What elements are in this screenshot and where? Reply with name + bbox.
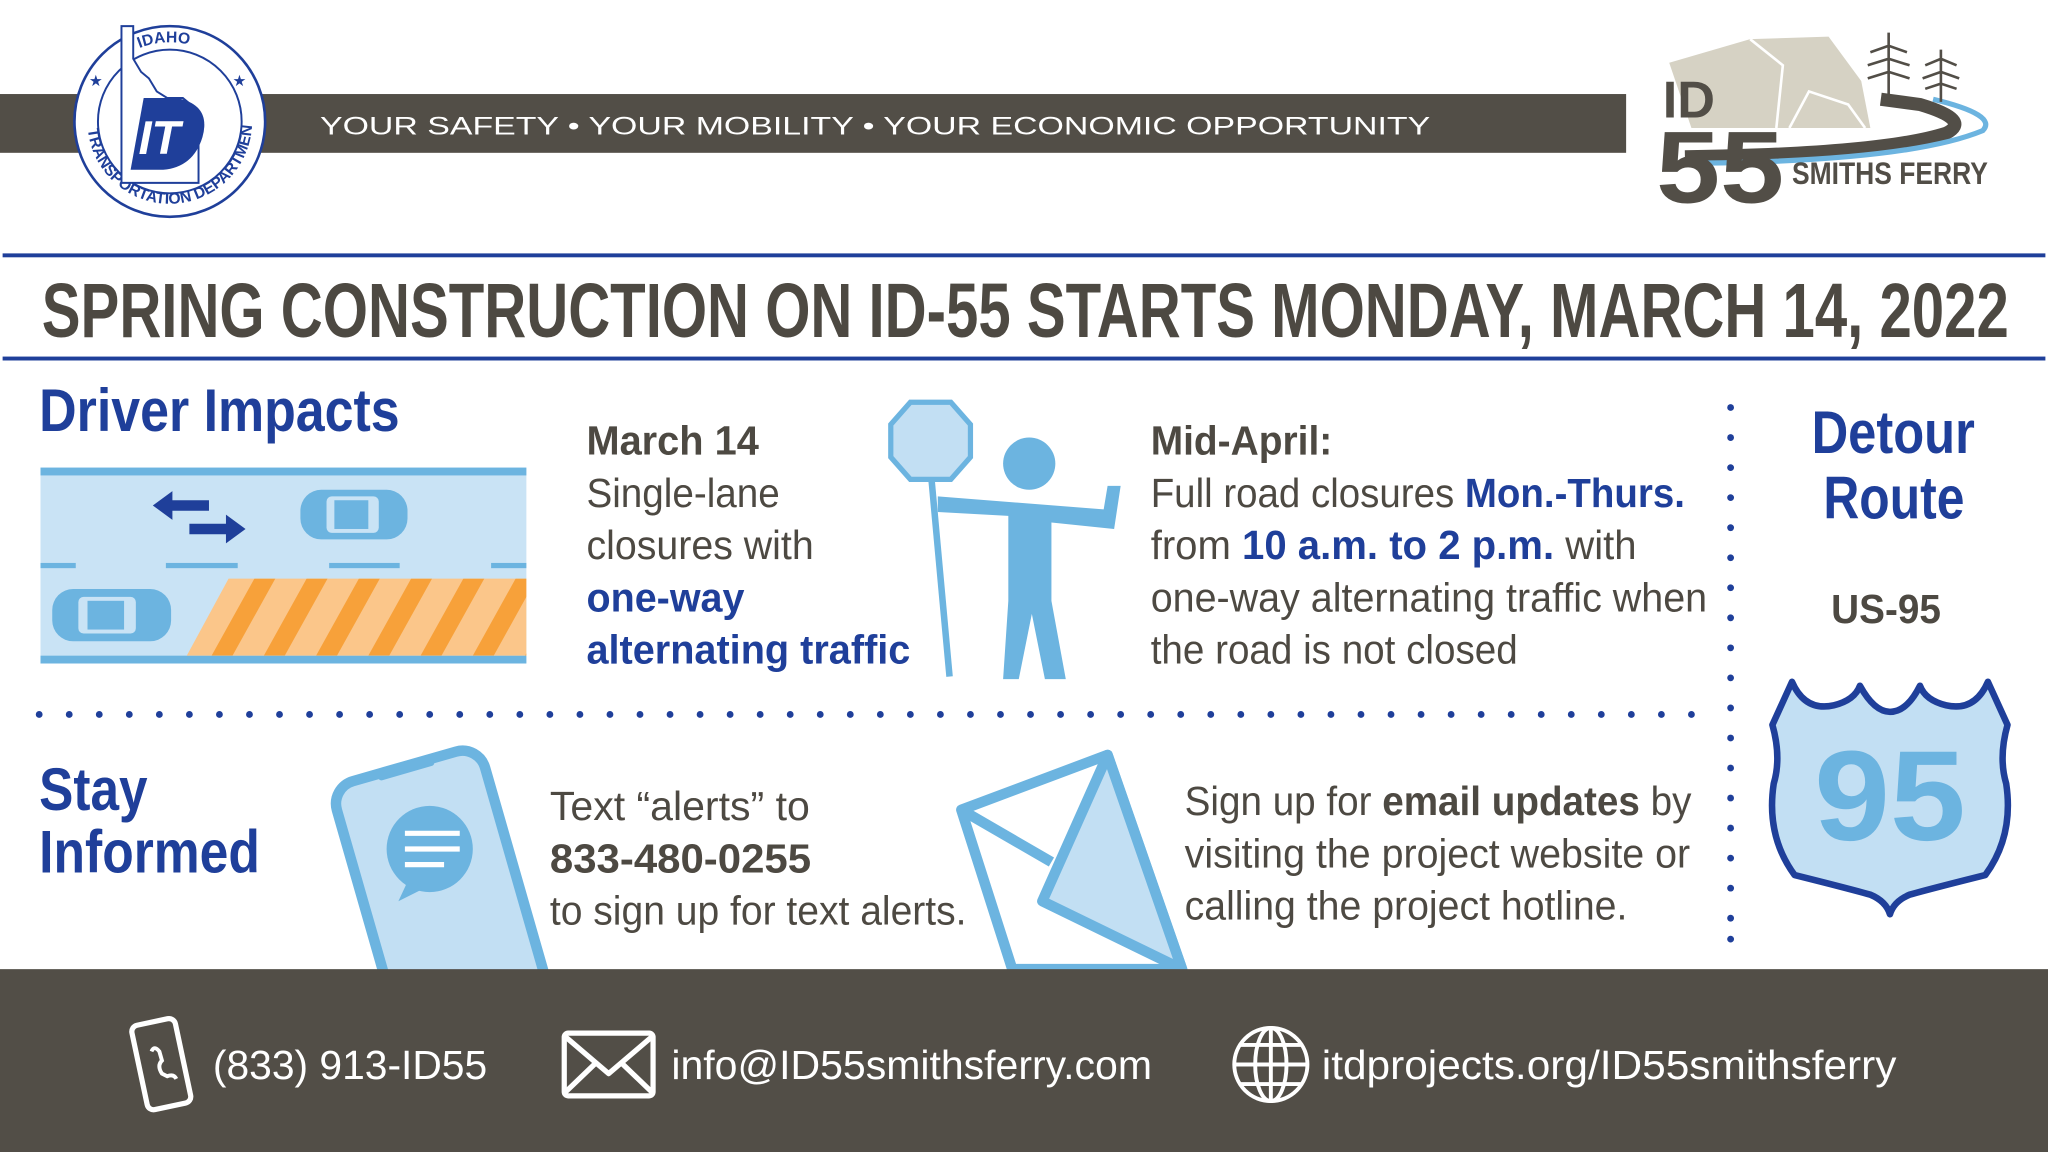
text: text alerts: 833-480-0255 bbox=[550, 835, 811, 881]
icon: globe bbox=[1234, 1028, 1307, 1101]
text: US-95: US-95 bbox=[1831, 586, 1941, 632]
footer bbox=[0, 969, 2048, 1152]
text: email updates: Sign up for email updates by bbox=[1185, 778, 1692, 824]
text: March 14: one-way bbox=[586, 574, 745, 620]
icon: US 95 shield: 95 bbox=[1814, 725, 1966, 868]
text: text alerts: to sign up for text alerts. bbox=[550, 888, 967, 934]
text: Mid-April bbox=[1151, 418, 1707, 673]
logo: ID55 Smiths Ferry bbox=[1656, 33, 1988, 224]
heading: Detour Route: Detour bbox=[1812, 399, 1975, 466]
logo: ID55 Smiths Ferry: 55 bbox=[1656, 110, 1784, 224]
header band bbox=[0, 94, 1626, 153]
text: Mid-April: Full road closures Mon.-Thurs. bbox=[1151, 470, 1685, 516]
text: Mid-April: one-way alternating traffic when bbox=[1151, 574, 1707, 620]
text: March 14: alternating traffic bbox=[586, 627, 910, 673]
text: March 14: closures with bbox=[586, 522, 814, 568]
heading: Driver Impacts: Driver Impacts bbox=[39, 377, 400, 444]
logo: ID55 Smiths Ferry: SMITHS FERRY bbox=[1792, 156, 1988, 191]
heading: Stay Informed: Informed bbox=[39, 818, 260, 885]
logo: ITD: ★ bbox=[89, 73, 103, 90]
icon: phone bbox=[131, 1017, 192, 1111]
footer: info@ID55smithsferry.com bbox=[671, 1042, 1152, 1088]
icon: envelope bbox=[961, 755, 1182, 969]
text: email updates: calling the project hotline. bbox=[1185, 883, 1627, 929]
text: Mid-April: from 10 a.m. to 2 p.m. with bbox=[1151, 522, 1637, 568]
heading: Stay Informed: Stay bbox=[39, 756, 148, 823]
logo: ITD bbox=[73, 24, 266, 218]
text: email updates bbox=[1185, 778, 1692, 929]
text: email updates: visiting the project website or bbox=[1185, 830, 1690, 876]
text: March 14: Single-lane bbox=[586, 470, 780, 516]
text: text alerts: Text “alerts” to bbox=[550, 783, 810, 829]
text: March 14: March 14 bbox=[586, 418, 759, 464]
road illustration bbox=[40, 468, 526, 664]
heading: Detour Route bbox=[1812, 399, 1975, 532]
footer: itdprojects.org/ID55smithsferry bbox=[1322, 1042, 1897, 1088]
text: Mid-April: the road is not closed bbox=[1151, 627, 1518, 673]
text: March 14 bbox=[586, 418, 910, 673]
horizontal dots bbox=[36, 711, 1695, 718]
icon: US 95 shield bbox=[1772, 682, 2008, 914]
icon: envelope bbox=[564, 1033, 653, 1096]
logo: ID55 Smiths Ferry: ID bbox=[1663, 72, 1715, 130]
heading: Stay Informed bbox=[39, 756, 260, 885]
logo: ITD: IDAHO bbox=[136, 32, 190, 48]
footer: (833) 913-ID55 bbox=[213, 1042, 487, 1088]
vertical dots bbox=[1727, 404, 1734, 942]
text: Mid-April: Mid-April: bbox=[1151, 418, 1332, 464]
logo: ITD: ★ bbox=[232, 73, 247, 90]
text: text alerts bbox=[550, 783, 967, 934]
logo: ITD: IT bbox=[138, 111, 185, 164]
tagline: YOUR SAFETY • YOUR MOBILITY • YOUR ECONOMIC OPPORTUNITY bbox=[320, 114, 1430, 141]
icon: flagger bbox=[891, 402, 1121, 679]
heading: Detour Route: Route bbox=[1823, 465, 1964, 532]
icon: phone with message bbox=[330, 745, 565, 1089]
